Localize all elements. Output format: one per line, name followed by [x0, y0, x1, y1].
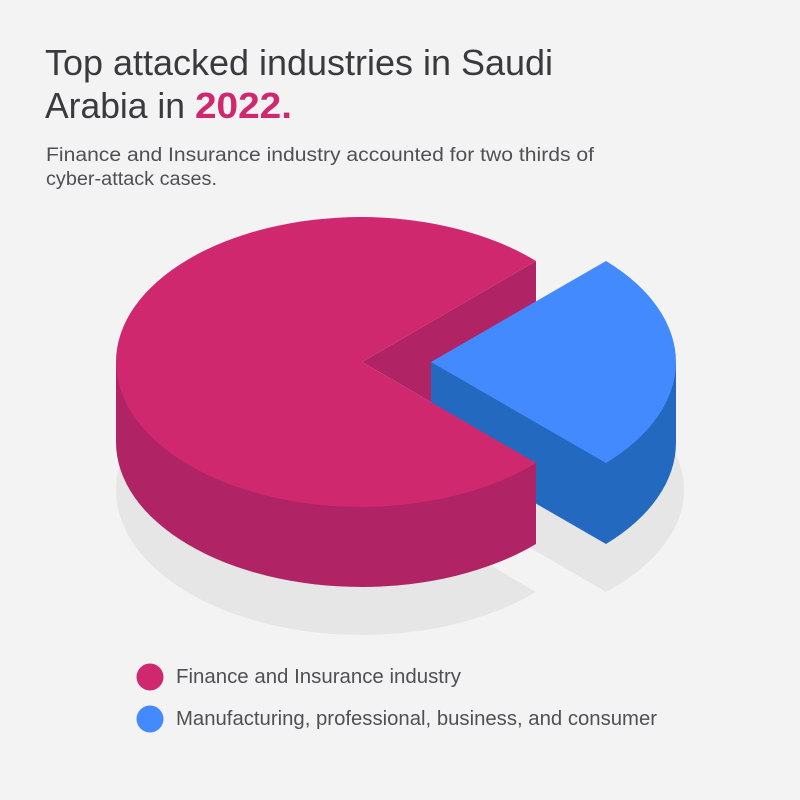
subtitle text block: cyber-attack cases. [46, 169, 217, 190]
finance slice top [116, 217, 536, 507]
manufacturing slice top [431, 261, 676, 463]
title: Top attacked industries in Saudi [45, 42, 553, 83]
manufacturing slice side [431, 362, 676, 544]
title: 2022. [195, 85, 292, 126]
legend item: manufacturing: Manufacturing, professional, business, and consumer [176, 708, 657, 730]
inner wall of finance slice [362, 261, 536, 463]
finance slice side [116, 362, 536, 587]
pie shadow [116, 345, 684, 635]
legend [136, 664, 657, 732]
title [45, 42, 553, 126]
subtitle text block: Finance and Insurance industry accounted for two thirds of [46, 145, 595, 166]
legend item: finance: Finance and Insurance industry [176, 666, 461, 688]
chart: 3D exploded pie [116, 217, 684, 635]
subtitle text block [46, 145, 595, 190]
title: Arabia in [45, 85, 185, 126]
